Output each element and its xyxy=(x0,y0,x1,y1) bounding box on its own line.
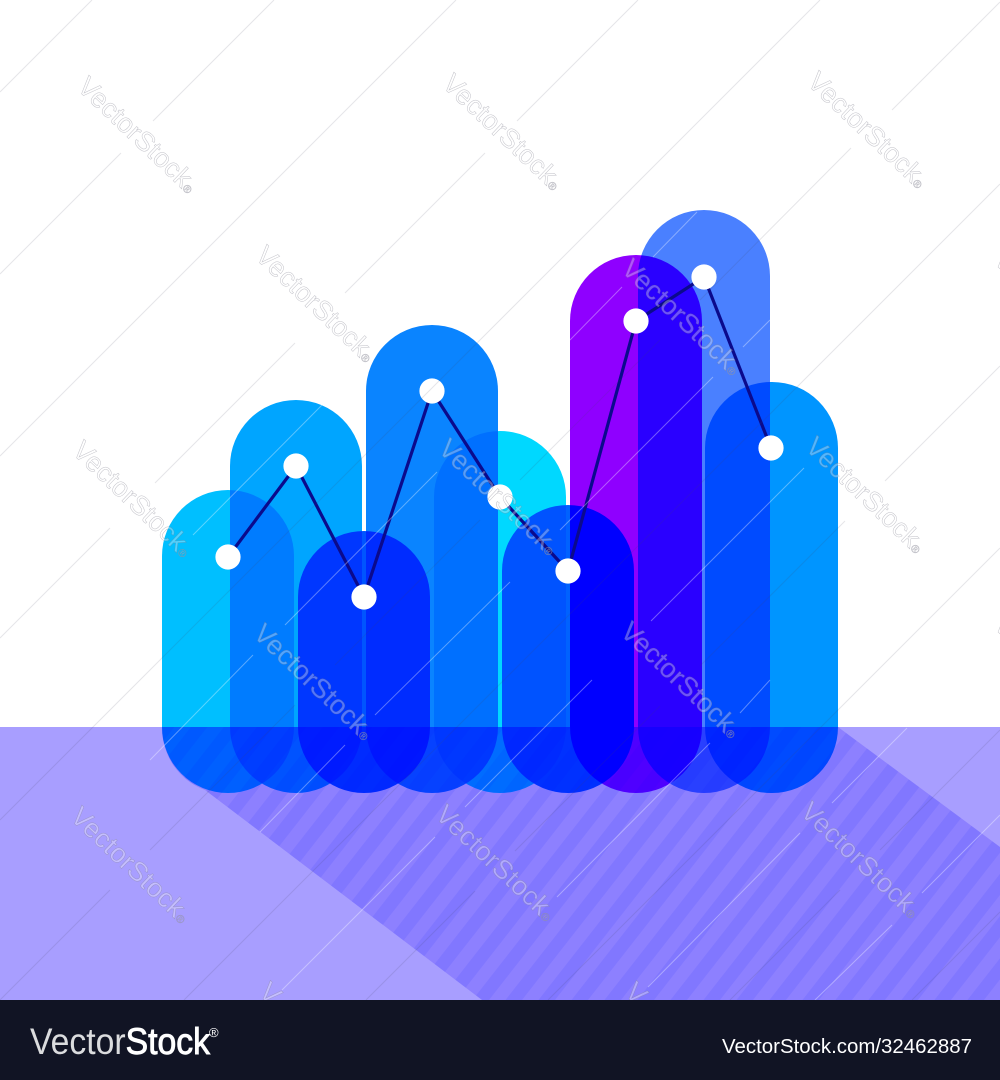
watermark text: VectorStock® xyxy=(250,240,382,368)
footer logo: VectorStock xyxy=(30,1021,210,1062)
watermark text: V xyxy=(619,976,653,1011)
watermark text: V xyxy=(253,976,287,1011)
watermark text: VectorStock® xyxy=(437,68,569,196)
watermark text: VectorStock® xyxy=(65,801,197,929)
striped long shadow xyxy=(162,727,1000,1000)
footer image id: VectorStock.com/32462887 xyxy=(722,1036,972,1058)
watermark text: VectorStock® xyxy=(616,253,748,381)
registered mark: ® xyxy=(209,1025,219,1040)
watermark text: VectorStock® xyxy=(615,616,747,744)
watermark text: VectorStock® xyxy=(433,433,565,561)
floor xyxy=(0,727,1000,1000)
watermark text: VectorStock® xyxy=(795,796,927,924)
watermark text: VectorStock® xyxy=(430,799,562,927)
watermark text: VectorStock® xyxy=(248,618,380,746)
footer bar xyxy=(0,1000,1000,1080)
data point markers xyxy=(215,264,784,610)
background xyxy=(0,0,1000,727)
watermark text: VectorStock® xyxy=(800,431,932,559)
bar chart: rounded translucent bars xyxy=(162,210,838,793)
watermark text: VectorStock® xyxy=(67,435,199,563)
watermark text: VectorStock® xyxy=(802,66,934,194)
watermark text: VectorStock® xyxy=(72,71,204,199)
line chart connecting data points xyxy=(228,277,771,597)
